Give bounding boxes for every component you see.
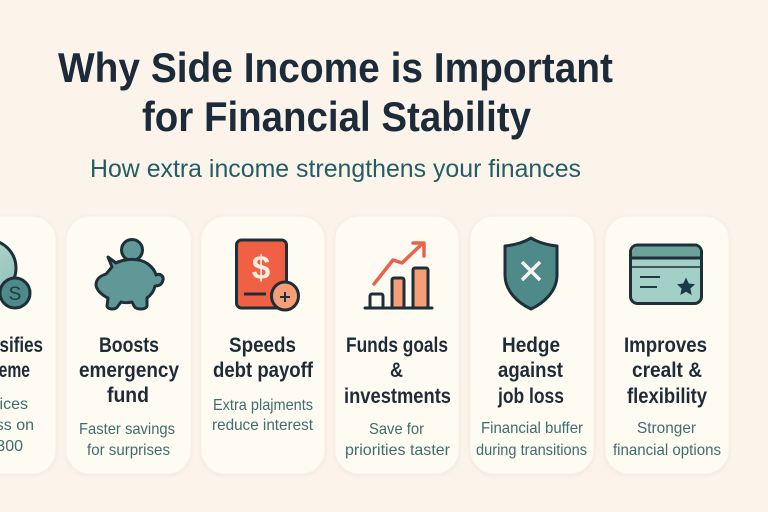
card heading: flexibility	[627, 385, 707, 408]
panel: diversifies income	[0, 216, 56, 474]
card heading: Boosts	[99, 334, 159, 357]
card description	[613, 420, 721, 459]
card description	[212, 397, 314, 434]
icon: person and coin: S	[9, 284, 21, 305]
card heading: Improves	[624, 334, 707, 357]
subtitle: How extra income strengthens your finances	[90, 155, 581, 183]
card heading	[79, 334, 179, 407]
icon: credit card with star	[630, 245, 702, 304]
card description	[79, 421, 175, 459]
card heading: &	[390, 359, 403, 382]
title	[58, 44, 613, 140]
card description: reduce interest	[212, 417, 314, 434]
icon: piggy bank	[96, 240, 163, 309]
card heading: debt payoff	[213, 359, 314, 382]
card description: financial options	[613, 442, 721, 459]
card heading	[213, 334, 314, 382]
panel: hedge against job loss	[470, 216, 594, 474]
icon: person and coin	[0, 240, 30, 308]
panel: speeds debt payoff	[201, 216, 325, 474]
card heading: Hedge	[502, 334, 560, 357]
card description: Extra plajments	[213, 397, 313, 414]
icon: debt document with plus coin: $	[252, 249, 270, 286]
card heading: fund	[107, 384, 149, 407]
card heading: against	[498, 359, 563, 382]
card description	[0, 396, 34, 455]
title: Why Side Income is Important	[58, 44, 613, 91]
panel: improves credit and flexibility	[605, 216, 729, 474]
card description	[345, 421, 451, 459]
card heading	[624, 334, 707, 408]
card description: priorities taster	[345, 442, 451, 459]
card heading	[0, 334, 43, 382]
card heading: crealt &	[632, 359, 702, 382]
card description: during transitions	[476, 442, 587, 459]
card description: Financial buffer	[481, 420, 584, 437]
icon: rising bar chart with arrow	[365, 243, 432, 308]
icon: debt document with plus coin	[236, 240, 298, 310]
card description	[476, 420, 587, 459]
card heading	[497, 334, 564, 408]
panel: funds goals and investments	[335, 216, 459, 474]
card heading: Funds goals	[346, 334, 448, 357]
card heading: Speeds	[229, 334, 296, 357]
title: for Financial Stability	[142, 93, 532, 140]
card heading	[344, 334, 451, 408]
card description: Faster savings	[79, 421, 175, 438]
card description: Stronger	[637, 420, 697, 437]
icon: shield with cross	[505, 238, 557, 309]
panel: boosts emergency fund	[66, 216, 191, 474]
card heading: investments	[344, 385, 451, 408]
card heading: job loss	[497, 385, 564, 408]
card heading: emergency	[79, 359, 179, 382]
card description: Save for	[369, 421, 425, 438]
card description: for surprises	[87, 442, 170, 459]
